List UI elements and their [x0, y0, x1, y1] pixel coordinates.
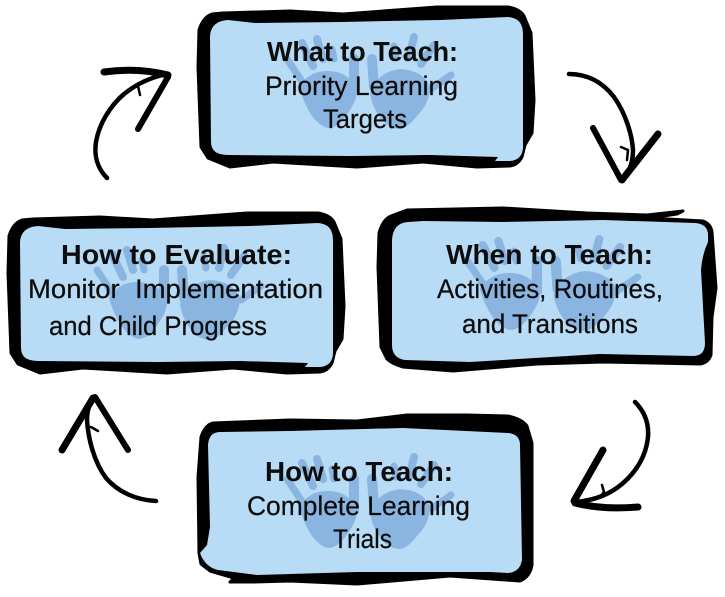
- text: Priority Learning Targets: Priority Learning: [265, 71, 458, 101]
- brush border: [378, 208, 716, 371]
- text: Activities, Routines, and Transitions: Activities, Routines,: [437, 274, 663, 304]
- panel: When to Teach: [378, 208, 716, 371]
- panel fill: [200, 428, 522, 575]
- icon: handprints: [97, 248, 261, 340]
- arrow: top to right: [569, 74, 658, 180]
- brush border: [8, 213, 344, 373]
- arrow: left to top: [95, 70, 168, 178]
- arrow: bottom to left: [62, 397, 156, 501]
- text: Complete Learning Trials: [247, 491, 470, 554]
- panel fill: [392, 220, 708, 362]
- text: Monitor Implementation and Child Progress: and Child Progress: [49, 311, 267, 341]
- panel fill: [20, 223, 333, 367]
- heading: What to Teach:: [267, 36, 458, 67]
- text: Activities, Routines, and Transitions: [437, 274, 663, 339]
- text: Complete Learning Trials: Trials: [333, 524, 392, 554]
- text: Monitor Implementation and Child Progress: Monitor Implementation: [28, 274, 323, 304]
- icon: handprints: [287, 37, 451, 129]
- panel fill: [210, 17, 523, 161]
- icon: handprints: [467, 239, 638, 331]
- heading: When to Teach:: [446, 239, 653, 270]
- arrow: right to bottom: [574, 402, 648, 508]
- panel: How to Evaluate: [8, 213, 344, 373]
- brush border: [198, 415, 532, 584]
- text: Activities, Routines, and Transitions: and Transitions: [462, 309, 638, 339]
- heading: How to Teach:: [265, 456, 453, 487]
- text: Priority Learning Targets: Targets: [323, 104, 407, 134]
- brush border: [198, 7, 534, 167]
- panel: What to Teach: [198, 7, 534, 167]
- text: Monitor Implementation and Child Progress: [28, 274, 323, 341]
- text: Complete Learning Trials: Complete Learning: [247, 491, 470, 521]
- text: Priority Learning Targets: [265, 71, 458, 134]
- icon: handprints: [287, 457, 451, 549]
- heading: How to Evaluate:: [61, 239, 292, 270]
- panel: How to Teach: [198, 415, 532, 584]
